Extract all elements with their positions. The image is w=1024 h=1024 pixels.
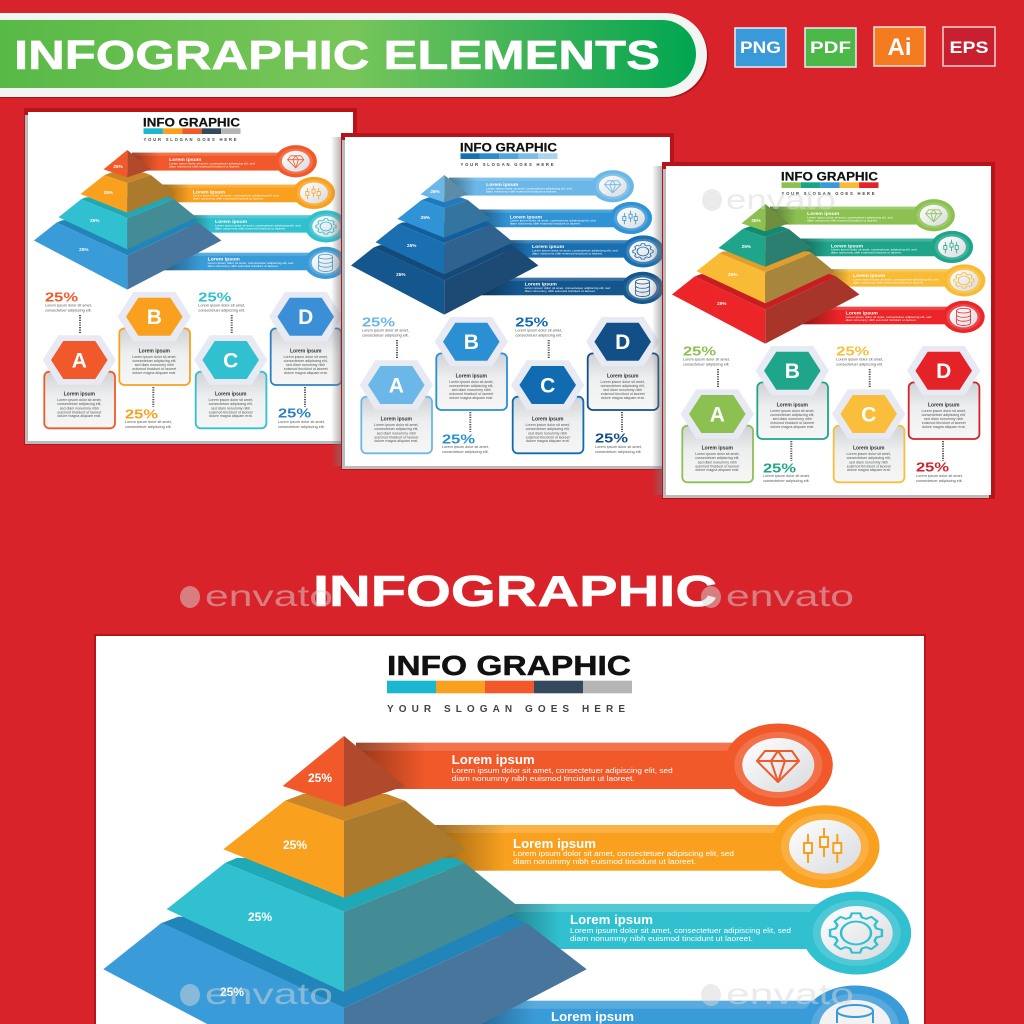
step A: euismod tincidunt ut laoreet bbox=[57, 410, 101, 414]
step C: dolore magna aliquam erat. bbox=[209, 414, 253, 418]
percent callouts: Lorem ipsum dolor sit amet, bbox=[278, 420, 325, 424]
step A: dolore magna aliquam erat. bbox=[57, 414, 101, 418]
bar 2: diam nonummy nibh euismod tincidunt ut laoreet. bbox=[193, 197, 264, 201]
percent callouts bbox=[45, 290, 325, 429]
percent callouts: consectetuer adipiscing elit. bbox=[836, 362, 883, 366]
step D: consectetuer adipiscing elit, bbox=[601, 384, 645, 388]
bar 1 bbox=[449, 170, 634, 202]
step A: Lorem ipsum bbox=[64, 392, 96, 398]
title bbox=[781, 172, 878, 196]
bar 3: Lorem ipsum dolor sit amet, consectetuer adipiscing elit, sed bbox=[215, 223, 301, 227]
step D: dolore magna aliquam erat. bbox=[922, 425, 966, 429]
bar 3 bbox=[188, 210, 347, 243]
step B: Lorem ipsum dolor sit amet, bbox=[132, 355, 176, 359]
bar 3: diam nonummy nibh euismod tincidunt ut laoreet. bbox=[853, 281, 924, 285]
step D: Lorem ipsum dolor sit amet, bbox=[601, 380, 645, 384]
pyramid tier 3: 25% bbox=[407, 243, 416, 248]
step C: euismod tincidunt ut laoreet bbox=[209, 410, 253, 414]
step D: Lorem ipsum dolor sit amet, bbox=[922, 409, 966, 413]
pyramid tier 2: 25% bbox=[421, 215, 430, 220]
icon: PDF badge bbox=[805, 28, 856, 67]
step D: Lorem ipsum bbox=[928, 402, 960, 408]
bar 4: Lorem ipsum dolor sit amet, consectetuer adipiscing elit, sed bbox=[846, 315, 932, 319]
bar 3 bbox=[500, 892, 911, 974]
pyramid tier 1 bbox=[421, 175, 468, 202]
bar 2: diam nonummy nibh euismod tincidunt ut laoreet. bbox=[831, 251, 902, 255]
bar 1: Lorem ipsum dolor sit amet, consectetuer adipiscing elit, sed bbox=[486, 186, 572, 190]
pyramid tier 1: 25% bbox=[430, 189, 440, 194]
step A: sed diam nonummy nibh bbox=[60, 406, 99, 410]
bar 2: diam nonummy nibh euismod tincidunt ut laoreet. bbox=[513, 857, 696, 866]
pyramid tier 4 bbox=[103, 917, 587, 1024]
title: YOUR SLOGAN GOES HERE bbox=[387, 704, 625, 715]
step B: Lorem ipsum bbox=[139, 348, 171, 354]
step A: A bbox=[72, 350, 87, 372]
pyramid tier 1 bbox=[104, 150, 151, 177]
percent callouts: Lorem ipsum dolor sit amet, bbox=[836, 358, 883, 362]
bar 2 bbox=[480, 202, 652, 234]
step D: Lorem ipsum bbox=[290, 348, 322, 354]
title bbox=[387, 650, 632, 715]
title bbox=[460, 143, 558, 167]
icon: PNG badge bbox=[735, 28, 786, 67]
percent callouts: consectetuer adipiscing elit. bbox=[595, 450, 642, 454]
percent callouts: Lorem ipsum dolor sit amet, bbox=[683, 358, 730, 362]
pyramid tier 1: 25% bbox=[113, 164, 123, 169]
bar 3: Lorem ipsum bbox=[853, 273, 885, 279]
bar 2 bbox=[801, 231, 973, 263]
percent callouts: Lorem ipsum dolor sit amet, bbox=[45, 304, 92, 308]
pyramid tier 3 bbox=[376, 222, 513, 274]
icon: PDF badge: PDF bbox=[810, 38, 851, 57]
step C: consectetuer adipiscing elit, bbox=[209, 402, 253, 406]
bar 1: Lorem ipsum bbox=[807, 211, 839, 217]
percent callouts: 25% bbox=[836, 344, 870, 359]
step B bbox=[435, 317, 508, 410]
step D: dolore magna aliquam erat. bbox=[284, 371, 328, 375]
bar 1: diam nonummy nibh euismod tincidunt ut laoreet. bbox=[486, 189, 557, 193]
bar 2: Lorem ipsum bbox=[513, 837, 596, 851]
percent callouts bbox=[683, 344, 963, 483]
pyramid tier 4 bbox=[351, 245, 538, 315]
bar 2: Lorem ipsum bbox=[831, 243, 863, 249]
percent callouts bbox=[362, 315, 642, 454]
percent callouts: consectetuer adipiscing elit. bbox=[683, 362, 730, 366]
percent callouts: 25% bbox=[278, 406, 312, 421]
pyramid tier 1 bbox=[742, 204, 789, 231]
percent callouts: Lorem ipsum dolor sit amet, bbox=[442, 445, 489, 449]
step B: consectetuer adipiscing elit, bbox=[132, 359, 176, 363]
panel: green and red infographic page bbox=[652, 162, 995, 499]
bar 2 bbox=[435, 805, 880, 888]
bar 3: diam nonummy nibh euismod tincidunt ut laoreet. bbox=[215, 227, 286, 231]
bar 2: Lorem ipsum dolor sit amet, consectetuer adipiscing elit, sed bbox=[510, 219, 596, 223]
pyramid tier 1: 25% bbox=[308, 771, 332, 785]
step A: euismod tincidunt ut laoreet bbox=[695, 464, 739, 468]
watermark right bottom bbox=[701, 978, 854, 1011]
step C: Lorem ipsum bbox=[215, 392, 247, 398]
percent callouts: consectetuer adipiscing elit. bbox=[278, 425, 325, 429]
percent callouts: consectetuer adipiscing elit. bbox=[45, 308, 92, 312]
pyramid tier 3: 25% bbox=[90, 218, 99, 223]
pyramid tier 4 bbox=[34, 220, 221, 290]
step A: A bbox=[710, 404, 725, 426]
step B: sed diam nonummy nibh bbox=[135, 363, 174, 367]
bar 4: Lorem ipsum bbox=[525, 282, 557, 288]
bar 4 bbox=[803, 301, 985, 333]
pyramid tier 4: 25% bbox=[220, 985, 244, 999]
percent callouts: consectetuer adipiscing elit. bbox=[442, 450, 489, 454]
step D: dolore magna aliquam erat. bbox=[601, 396, 645, 400]
bar 2: Lorem ipsum dolor sit amet, consectetuer adipiscing elit, sed bbox=[193, 194, 279, 198]
bar 4: Lorem ipsum dolor sit amet, consectetuer adipiscing elit, sed bbox=[208, 261, 294, 265]
title bbox=[143, 118, 240, 142]
bar 4: Lorem ipsum dolor sit amet, consectetuer adipiscing elit, sed bbox=[525, 286, 611, 290]
title: YOUR SLOGAN GOES HERE bbox=[144, 137, 237, 142]
pyramid tier 2: 25% bbox=[104, 190, 113, 195]
step B bbox=[118, 292, 191, 385]
watermark right middle: envato bbox=[726, 580, 854, 613]
step B: euismod tincidunt ut laoreet bbox=[449, 392, 493, 396]
step D: Lorem ipsum dolor sit amet, bbox=[284, 355, 328, 359]
bar 1: Lorem ipsum bbox=[486, 182, 518, 188]
percent callouts: 25% bbox=[45, 290, 79, 305]
percent callouts: consectetuer adipiscing elit. bbox=[916, 479, 963, 483]
bar 3: Lorem ipsum bbox=[570, 913, 653, 927]
percent callouts: 25% bbox=[683, 344, 717, 359]
pyramid tier 2 bbox=[397, 198, 491, 238]
step D: D bbox=[615, 331, 630, 354]
step B: Lorem ipsum bbox=[456, 373, 488, 379]
watermark top panel bbox=[702, 184, 836, 215]
bar 1: diam nonummy nibh euismod tincidunt ut laoreet. bbox=[169, 164, 240, 168]
bar 1 bbox=[770, 199, 955, 231]
bar 3: Lorem ipsum bbox=[532, 244, 564, 250]
percent callouts: Lorem ipsum dolor sit amet, bbox=[595, 445, 642, 449]
step C: C bbox=[223, 350, 238, 372]
step A: Lorem ipsum bbox=[381, 417, 413, 423]
step A: consectetuer adipiscing elit, bbox=[695, 456, 739, 460]
step C: Lorem ipsum dolor sit amet, bbox=[209, 398, 253, 402]
bar 3: Lorem ipsum bbox=[215, 219, 247, 225]
bar 3: Lorem ipsum dolor sit amet, consectetuer adipiscing elit, sed bbox=[532, 248, 618, 252]
bar 1: diam nonummy nibh euismod tincidunt ut laoreet. bbox=[807, 218, 878, 222]
bar 1: Lorem ipsum bbox=[452, 753, 535, 767]
percent callouts: consectetuer adipiscing elit. bbox=[763, 479, 810, 483]
pyramid with bars bbox=[34, 145, 347, 290]
step B: sed diam nonummy nibh bbox=[452, 388, 491, 392]
step C: consectetuer adipiscing elit, bbox=[526, 427, 570, 431]
bar 3: Lorem ipsum dolor sit amet, consectetuer adipiscing elit, sed bbox=[853, 277, 939, 281]
step A bbox=[681, 389, 754, 482]
bar 4: diam nonummy nibh euismod tincidunt ut laoreet. bbox=[208, 264, 279, 268]
pyramid tier 1: 25% bbox=[751, 218, 761, 223]
step D bbox=[586, 317, 659, 410]
icon: Ai badge bbox=[874, 27, 925, 66]
pyramid with bars bbox=[351, 170, 664, 315]
step D: sed diam nonummy nibh bbox=[924, 417, 963, 421]
percent callouts: 25% bbox=[442, 431, 476, 446]
pyramid tier 1 bbox=[283, 736, 405, 807]
percent callouts: Lorem ipsum dolor sit amet, bbox=[916, 474, 963, 478]
pyramid tier 4: 25% bbox=[717, 301, 726, 306]
pyramid with bars bbox=[672, 199, 985, 344]
percent callouts: 25% bbox=[362, 315, 396, 330]
title: INFO GRAPHIC bbox=[460, 143, 557, 155]
bar 3 bbox=[505, 235, 664, 268]
step A bbox=[43, 335, 116, 428]
watermark right middle bbox=[701, 580, 854, 613]
step B: Lorem ipsum bbox=[777, 402, 809, 408]
step C bbox=[194, 335, 267, 428]
percent callouts: 25% bbox=[198, 290, 232, 305]
percent callouts: consectetuer adipiscing elit. bbox=[515, 334, 562, 338]
step B: consectetuer adipiscing elit, bbox=[770, 413, 814, 417]
watermark right bottom: envato bbox=[726, 978, 854, 1011]
pyramid tier 3 bbox=[59, 197, 196, 249]
bar 4: Lorem ipsum bbox=[846, 311, 878, 317]
step D: sed diam nonummy nibh bbox=[603, 388, 642, 392]
bar 4: Lorem ipsum bbox=[551, 1010, 634, 1024]
percent callouts: 25% bbox=[125, 406, 159, 421]
pyramid tier 2 bbox=[718, 227, 812, 267]
step C: Lorem ipsum bbox=[532, 417, 564, 423]
step D: D bbox=[936, 360, 951, 383]
step D: sed diam nonummy nibh bbox=[286, 363, 325, 367]
step A: Lorem ipsum dolor sit amet, bbox=[695, 452, 739, 456]
bar 1 bbox=[356, 724, 833, 806]
step B: dolore magna aliquam erat. bbox=[770, 425, 814, 429]
title: INFO GRAPHIC bbox=[143, 118, 240, 130]
bar 4: Lorem ipsum bbox=[208, 257, 240, 263]
step C: sed diam nonummy nibh bbox=[849, 460, 888, 464]
bar 1: Lorem ipsum bbox=[169, 157, 201, 163]
step B: B bbox=[147, 306, 162, 329]
step D bbox=[269, 292, 342, 385]
bar 2 bbox=[163, 177, 335, 209]
step D: euismod tincidunt ut laoreet bbox=[284, 367, 328, 371]
bar 1 bbox=[132, 145, 317, 177]
percent callouts: 25% bbox=[763, 460, 797, 475]
step C: Lorem ipsum dolor sit amet, bbox=[847, 452, 891, 456]
pyramid tier 2 bbox=[80, 173, 174, 213]
step A: Lorem ipsum dolor sit amet, bbox=[374, 423, 418, 427]
step A: dolore magna aliquam erat. bbox=[695, 468, 739, 472]
icon: EPS badge bbox=[943, 27, 995, 66]
icon: PNG badge: PNG bbox=[740, 38, 781, 57]
step B: euismod tincidunt ut laoreet bbox=[770, 421, 814, 425]
percent callouts: Lorem ipsum dolor sit amet, bbox=[515, 328, 562, 332]
panel: orange and blue infographic page bbox=[24, 108, 357, 445]
pyramid tier 3 bbox=[697, 251, 834, 303]
bar 2: diam nonummy nibh euismod tincidunt ut laoreet. bbox=[510, 222, 581, 226]
watermark top panel: envato bbox=[726, 184, 836, 215]
pyramid tier 4: 25% bbox=[396, 272, 405, 277]
bar 2: Lorem ipsum dolor sit amet, consectetuer adipiscing elit, sed bbox=[513, 849, 734, 858]
bar 4 bbox=[482, 272, 664, 304]
bar 1: Lorem ipsum dolor sit amet, consectetuer adipiscing elit, sed bbox=[169, 161, 255, 165]
bar 1: Lorem ipsum dolor sit amet, consectetuer adipiscing elit, sed bbox=[807, 215, 893, 219]
step B: dolore magna aliquam erat. bbox=[132, 371, 176, 375]
step D: consectetuer adipiscing elit, bbox=[922, 413, 966, 417]
title: INFO GRAPHIC bbox=[781, 172, 878, 184]
bar 4 bbox=[470, 985, 909, 1024]
step D: euismod tincidunt ut laoreet bbox=[922, 421, 966, 425]
step D: consectetuer adipiscing elit, bbox=[284, 359, 328, 363]
icon: EPS badge: EPS bbox=[950, 38, 988, 57]
step B: sed diam nonummy nibh bbox=[773, 417, 812, 421]
step A: Lorem ipsum bbox=[702, 446, 734, 452]
step A: Lorem ipsum dolor sit amet, bbox=[57, 398, 101, 402]
icon: Ai badge: Ai bbox=[888, 34, 912, 61]
pyramid tier 3: 25% bbox=[248, 910, 272, 924]
step A: euismod tincidunt ut laoreet bbox=[374, 435, 418, 439]
step A: consectetuer adipiscing elit, bbox=[57, 402, 101, 406]
step C: sed diam nonummy nibh bbox=[528, 431, 567, 435]
step B: B bbox=[785, 360, 800, 383]
step C: dolore magna aliquam erat. bbox=[847, 468, 891, 472]
step B: dolore magna aliquam erat. bbox=[449, 396, 493, 400]
watermark left bottom bbox=[180, 978, 333, 1011]
step D: D bbox=[298, 306, 313, 329]
step C: euismod tincidunt ut laoreet bbox=[847, 464, 891, 468]
step C: Lorem ipsum dolor sit amet, bbox=[526, 423, 570, 427]
banner: infographic elements bbox=[0, 13, 708, 98]
pyramid tier 3: 25% bbox=[728, 272, 737, 277]
bar 4: diam nonummy nibh euismod tincidunt ut laoreet. bbox=[525, 289, 596, 293]
step A bbox=[360, 360, 433, 453]
bar 3: Lorem ipsum dolor sit amet, consectetuer adipiscing elit, sed bbox=[570, 926, 791, 935]
bar 4: diam nonummy nibh euismod tincidunt ut laoreet. bbox=[846, 318, 917, 322]
watermark left bottom: envato bbox=[205, 978, 333, 1011]
panel: blue infographic page bbox=[331, 133, 674, 470]
step C: consectetuer adipiscing elit, bbox=[847, 456, 891, 460]
percent callouts: 25% bbox=[916, 460, 950, 475]
panel: large infographic preview bbox=[94, 634, 926, 1024]
pyramid tier 2 bbox=[223, 794, 465, 898]
percent callouts: 25% bbox=[515, 315, 549, 330]
title: YOUR SLOGAN GOES HERE bbox=[782, 191, 875, 196]
bar 2: Lorem ipsum bbox=[510, 214, 542, 220]
bar 4 bbox=[165, 247, 347, 279]
step D: euismod tincidunt ut laoreet bbox=[601, 392, 645, 396]
step A: dolore magna aliquam erat. bbox=[374, 439, 418, 443]
step C bbox=[511, 360, 584, 453]
bar 2: Lorem ipsum dolor sit amet, consectetuer adipiscing elit, sed bbox=[831, 248, 917, 252]
section heading: infographic: INFOGRAPHIC bbox=[313, 567, 717, 616]
step B: Lorem ipsum dolor sit amet, bbox=[770, 409, 814, 413]
bar 1: diam nonummy nibh euismod tincidunt ut laoreet. bbox=[452, 774, 635, 783]
step A: consectetuer adipiscing elit, bbox=[374, 427, 418, 431]
bar 3: diam nonummy nibh euismod tincidunt ut laoreet. bbox=[570, 934, 753, 943]
step D bbox=[907, 346, 980, 439]
step B: Lorem ipsum dolor sit amet, bbox=[449, 380, 493, 384]
step C: dolore magna aliquam erat. bbox=[526, 439, 570, 443]
title: INFO GRAPHIC bbox=[387, 650, 631, 681]
watermark left middle: envato bbox=[205, 580, 333, 613]
step C bbox=[832, 389, 905, 482]
pyramid tier 2: 25% bbox=[283, 838, 307, 852]
percent callouts: Lorem ipsum dolor sit amet, bbox=[125, 420, 172, 424]
percent callouts: consectetuer adipiscing elit. bbox=[198, 308, 245, 312]
banner heading: INFOGRAPHIC ELEMENTS bbox=[14, 32, 660, 78]
step C: C bbox=[540, 374, 555, 398]
percent callouts: consectetuer adipiscing elit. bbox=[125, 425, 172, 429]
step C: euismod tincidunt ut laoreet bbox=[526, 435, 570, 439]
step C: C bbox=[861, 404, 876, 426]
step A: sed diam nonummy nibh bbox=[698, 460, 737, 464]
pyramid tier 2: 25% bbox=[742, 244, 751, 249]
percent callouts: Lorem ipsum dolor sit amet, bbox=[362, 328, 409, 332]
step C: sed diam nonummy nibh bbox=[211, 406, 250, 410]
percent callouts: Lorem ipsum dolor sit amet, bbox=[763, 474, 810, 478]
bar 1: Lorem ipsum dolor sit amet, consectetuer adipiscing elit, sed bbox=[452, 766, 673, 775]
step A: A bbox=[389, 374, 404, 398]
step D: Lorem ipsum bbox=[607, 373, 639, 379]
pyramid tier 3 bbox=[167, 858, 522, 992]
step B: consectetuer adipiscing elit, bbox=[449, 384, 493, 388]
step B: euismod tincidunt ut laoreet bbox=[132, 367, 176, 371]
pyramid tier 4 bbox=[672, 274, 859, 344]
bar 3: diam nonummy nibh euismod tincidunt ut laoreet. bbox=[532, 252, 603, 256]
bar 3 bbox=[826, 264, 985, 297]
percent callouts: consectetuer adipiscing elit. bbox=[362, 334, 409, 338]
step B: B bbox=[464, 331, 479, 354]
percent callouts: Lorem ipsum dolor sit amet, bbox=[198, 304, 245, 308]
watermark left middle bbox=[180, 580, 333, 613]
step C: Lorem ipsum bbox=[853, 446, 885, 452]
step B bbox=[756, 346, 829, 439]
bar 2: Lorem ipsum bbox=[193, 189, 225, 195]
pyramid tier 4: 25% bbox=[79, 247, 88, 252]
percent callouts: 25% bbox=[595, 431, 629, 446]
step A: sed diam nonummy nibh bbox=[377, 431, 416, 435]
title: YOUR SLOGAN GOES HERE bbox=[460, 162, 554, 167]
